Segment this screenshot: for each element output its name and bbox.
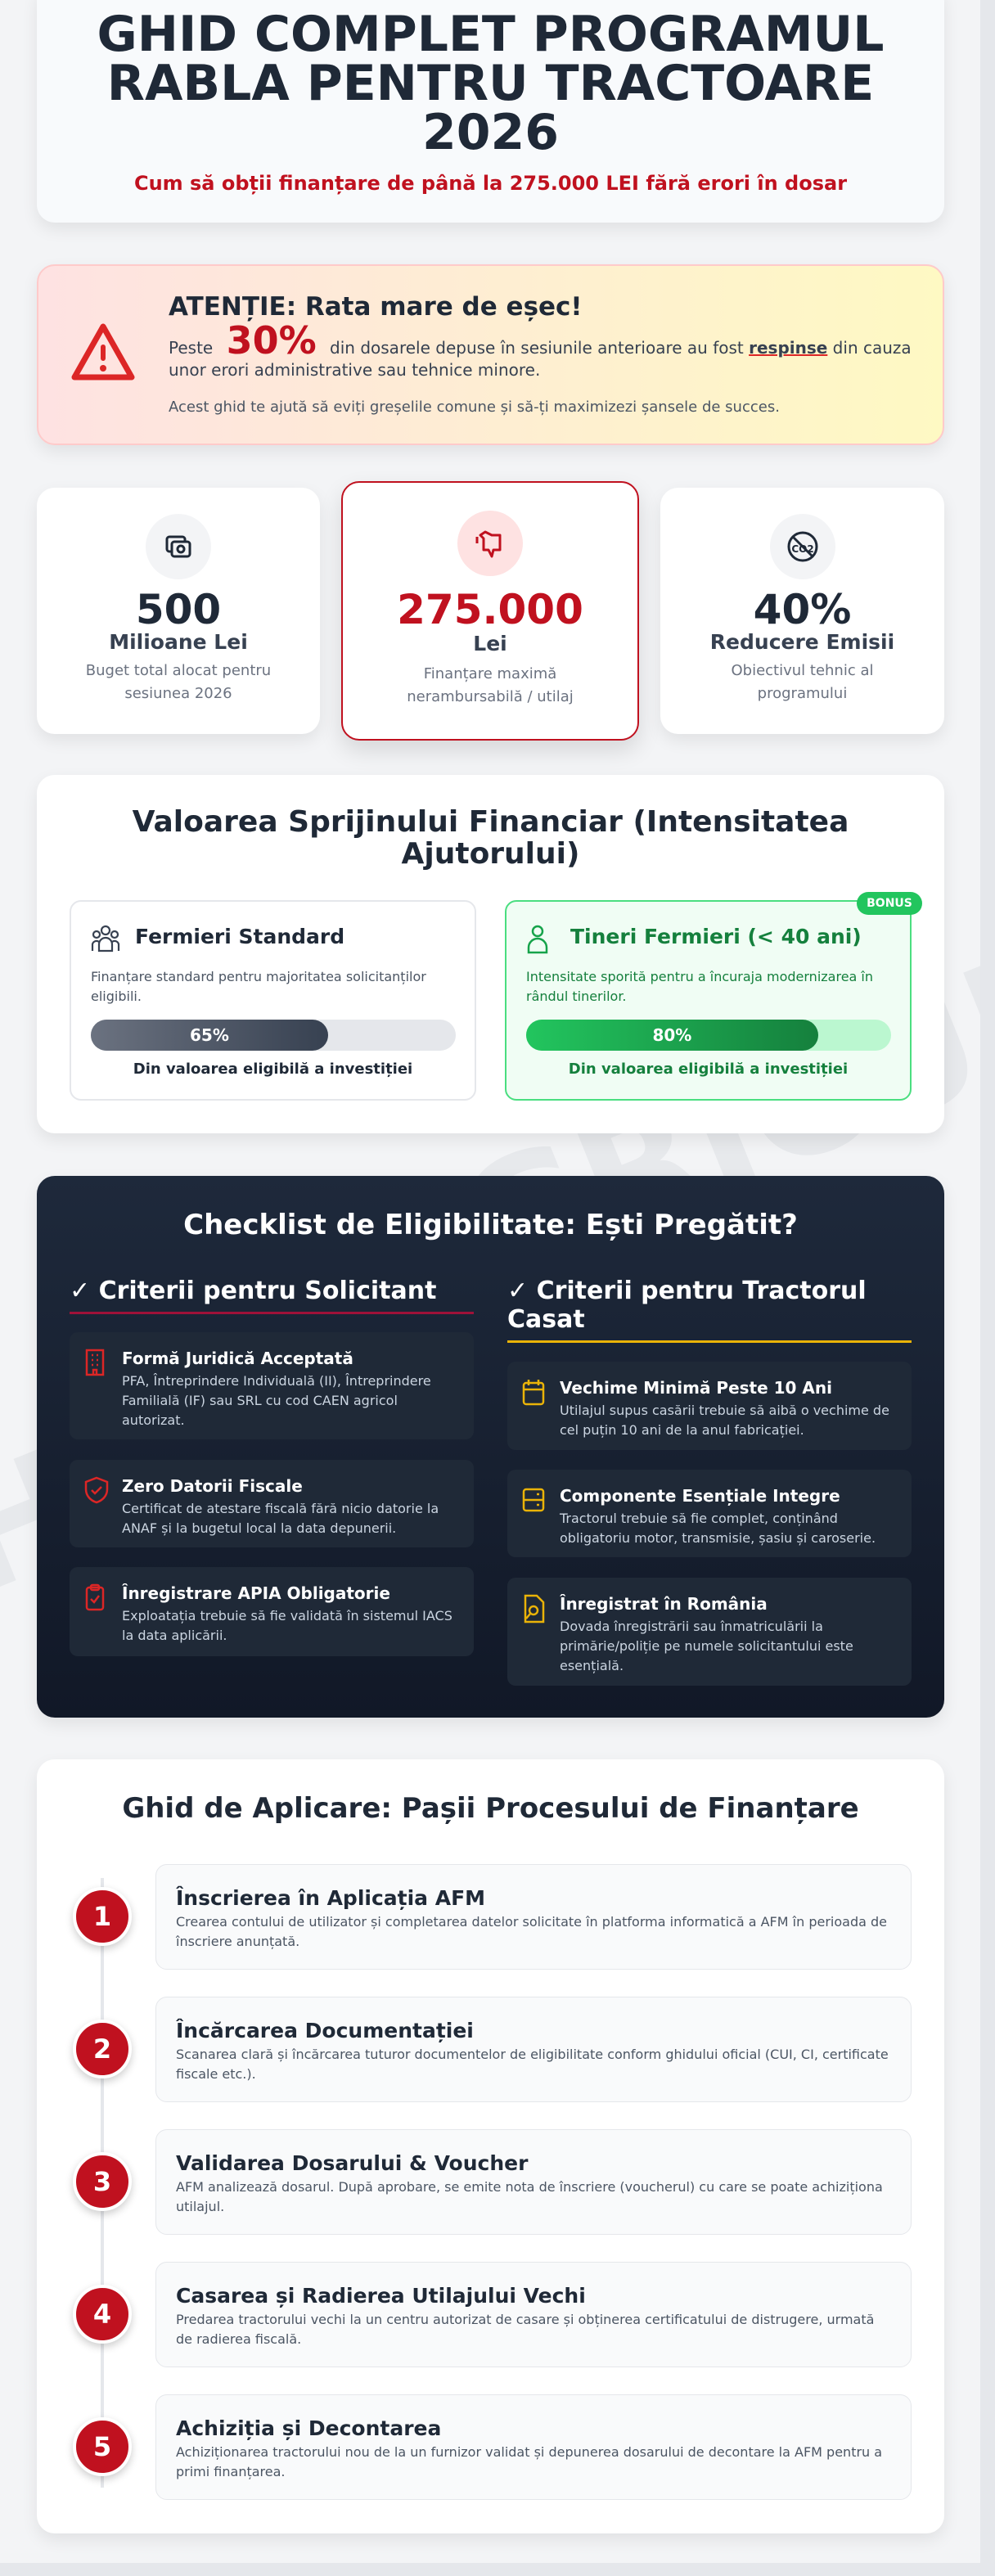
alert heading: ATENȚIE: Rata mare de eșec! (169, 292, 583, 322)
bar 65%: 65% (190, 1025, 229, 1045)
item: registered: Dovada înregistrării sau înmatriculării la primărie/poliție pe numele solicitantului este esențială. (560, 1619, 853, 1673)
column: applicant: ✓ Criterii pentru Solicitant (70, 1277, 436, 1305)
card: young farmers (505, 900, 912, 1101)
icon: warning (72, 324, 134, 380)
step 4: Casarea și Radierea Utilajului Vechi (176, 2284, 586, 2308)
card: standard farmers: Finanțare standard pentru majoritatea solicitanților eligibili. (91, 969, 426, 1004)
icon: no co2 (769, 514, 835, 579)
intensity heading (133, 805, 849, 871)
steps heading: Ghid de Aplicare: Pașii Procesului de Finanțare (122, 1792, 859, 1825)
stat: budget: Milioane Lei (109, 630, 248, 654)
step 5: Achiziția și Decontarea (176, 2416, 441, 2440)
step 2: 2 (93, 2033, 111, 2065)
bar 80%: 80% (652, 1025, 691, 1045)
stat: max funding (341, 481, 639, 741)
column: applicant (70, 1277, 474, 1656)
step 2: Scanarea clară și încărcarea tuturor documentelor de eligibilitate conform ghidului oficial (CUI, CI, certificate fiscale etc.). (176, 2047, 889, 2082)
title: RABLA PENTRU TRACTOARE (107, 55, 874, 112)
item: no tax debt (70, 1460, 474, 1547)
item: legal form (70, 1332, 474, 1439)
stat: budget: Buget total alocat pentru sesiunea 2026 (86, 662, 271, 702)
panel: application steps (37, 1759, 944, 2533)
item: components (507, 1470, 912, 1557)
item: registered: Înregistrat în România (560, 1594, 768, 1614)
item: age: Vechime Minimă Peste 10 Ani (560, 1378, 832, 1398)
checklist heading: Checklist de Eligibilitate: Ești Pregătit? (183, 1209, 798, 1241)
item: age (507, 1362, 912, 1450)
step 1: Crearea contului de utilizator și completarea datelor solicitate în platforma informatică a AFM în perioada de înscriere anunțată. (176, 1914, 887, 1949)
intensity heading: Ajutorului) (402, 837, 579, 871)
stat: emissions: Obiectivul tehnic al programului (731, 662, 874, 702)
card: young farmers: Din valoarea eligibilă a investiției (569, 1061, 848, 1078)
step 3: AFM analizează dosarul. După aprobare, se emite nota de înscriere (voucherul) cu care se poate achiziționa utilajul. (176, 2179, 883, 2214)
icon: person (527, 925, 548, 954)
step 1: 1 (93, 1901, 111, 1932)
column: tractor: ✓ Criterii pentru Tractorul Casat (507, 1277, 867, 1334)
card: young farmers: Tineri Fermieri (< 40 ani) (570, 925, 862, 948)
panel: aid intensity (37, 775, 944, 1133)
step 2: Încărcarea Documentației (176, 2019, 474, 2042)
card: young farmers: Intensitate sporită pentru a încuraja modernizarea în rândul tinerilor. (526, 969, 873, 1004)
stat: max funding: 275.000 (397, 586, 583, 633)
icon: no co2: CO2 (791, 543, 813, 555)
item: legal form: PFA, Întreprindere Individuală (II), Întreprindere Familială (IF) sau SRL cu cod CAEN agricol autorizat. (122, 1373, 431, 1428)
item: legal form: Formă Juridică Acceptată (122, 1349, 353, 1368)
item: components: Componente Esențiale Integre (560, 1486, 840, 1506)
item: apia (70, 1567, 474, 1656)
header card (37, 0, 944, 223)
step 5: Achiziționarea tractorului nou de la un furnizor validat și depunerea dosarului de decontare la AFM pentru a primi finanțarea. (176, 2444, 882, 2479)
title: GHID COMPLET PROGRAMUL (97, 6, 884, 63)
step 3: 3 (93, 2166, 111, 2197)
step 1 (69, 1864, 912, 1970)
stat: emissions (660, 488, 944, 734)
item: no tax debt: Certificat de atestare fiscală fără nicio datorie la ANAF și la bugetul local la data depunerii. (122, 1501, 439, 1536)
item: components: Tractorul trebuie să fie complet, conținând obligatoriu motor, transmisie, șasiu și caroserie. (560, 1511, 876, 1546)
stat: emissions: Reducere Emisii (710, 630, 894, 654)
bar 65% (91, 1020, 456, 1051)
title: 2026 (422, 104, 559, 161)
panel: eligibility checklist (37, 1176, 944, 1718)
item: age: Utilajul supus casării trebuie să aibă o vechime de cel puțin 10 ani de la anul fabricației. (560, 1403, 889, 1438)
badge: bonus: BONUS (867, 897, 912, 910)
icon: group (92, 925, 119, 952)
stat: budget (37, 488, 320, 734)
stat: emissions: 40% (754, 586, 851, 633)
step 3: Validarea Dosarului & Voucher (176, 2151, 528, 2175)
step 3 (69, 2129, 912, 2235)
stat: budget: 500 (136, 586, 221, 633)
subtitle: Cum să obții finanțare de până la 275.000 LEI fără erori în dosar (134, 172, 847, 195)
item: apia: Înregistrare APIA Obligatorie (122, 1583, 390, 1603)
card: standard farmers (70, 900, 476, 1101)
step 5: 5 (93, 2431, 111, 2462)
step 4: Predarea tractorului vechi la un centru autorizat de casare și obținerea certificatului de distrugere, urmată de radierea fiscală. (176, 2312, 874, 2347)
column: tractor (507, 1277, 912, 1686)
stat: max funding: Lei (473, 632, 507, 655)
stat: max funding: Finanțare maximă nerambursabilă / utilaj (407, 665, 574, 705)
item: registered (507, 1578, 912, 1686)
card: standard farmers: Fermieri Standard (135, 925, 344, 948)
badge: bonus (857, 892, 922, 915)
step 1: Înscrierea în Aplicația AFM (176, 1886, 485, 1910)
step 2 (69, 1997, 912, 2102)
title (97, 6, 884, 161)
icon: money (146, 514, 211, 579)
alert panel (37, 264, 944, 445)
intensity heading: Valoarea Sprijinului Financiar (Intensitatea (133, 805, 849, 839)
card: standard farmers: Din valoarea eligibilă a investiției (133, 1061, 412, 1078)
step 4: 4 (93, 2299, 111, 2330)
alert text: Peste 30% din dosarele depuse în sesiunile anterioare au fost respinse din cauza unor erori administrative sau tehnice minore. (169, 318, 912, 380)
timeline line (101, 1878, 104, 2488)
step 4 (69, 2262, 912, 2367)
alert note: Acest ghid te ajută să eviți greșelile comune și să-ți maximizezi șansele de succes. (169, 399, 780, 416)
item: no tax debt: Zero Datorii Fiscale (122, 1476, 303, 1496)
icon: tractor (457, 511, 523, 576)
bar 80% (526, 1020, 891, 1051)
item: apia: Exploatația trebuie să fie validată în sistemul IACS la data aplicării. (122, 1608, 452, 1643)
step 5 (69, 2394, 912, 2500)
